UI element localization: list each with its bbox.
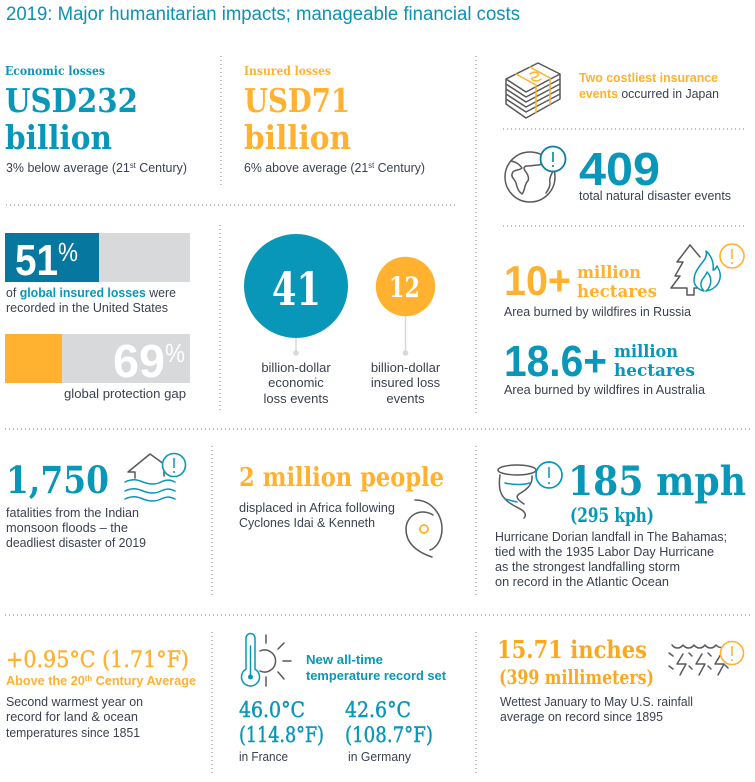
fatalities caption: fatalities from the Indian bbox=[6, 505, 139, 520]
panel: 69 percent bar bbox=[5, 334, 190, 401]
costliest events text: Two costliest insurance bbox=[579, 70, 718, 85]
displaced caption: Cyclones Idai & Kenneth bbox=[239, 515, 375, 530]
panel: 51 percent bar: % bbox=[58, 237, 78, 267]
insured losses value: USD71 bbox=[244, 81, 350, 120]
economic losses note: Century) bbox=[136, 160, 187, 175]
icon: globe with alert bbox=[505, 146, 566, 202]
fatalities caption: deadliest disaster of 2019 bbox=[6, 535, 146, 550]
temperature subheading: th bbox=[85, 674, 92, 683]
Germany record: (108.7°F) bbox=[345, 723, 433, 747]
temperature caption: temperatures since 1851 bbox=[6, 725, 140, 740]
panel: monsoon fatalities bbox=[6, 454, 186, 550]
Australia unit: hectares bbox=[614, 361, 695, 381]
icon: flooded house bbox=[125, 454, 186, 501]
costliest events text: events occurred in Japan bbox=[579, 86, 725, 101]
panel: billion-dollar insured events bbox=[371, 257, 441, 406]
temperature subheading: Century Average bbox=[92, 673, 196, 688]
panel: Russia wildfires bbox=[504, 244, 744, 319]
69 percent caption: global protection gap bbox=[64, 386, 186, 401]
economic events caption: economic bbox=[268, 375, 324, 390]
temperature subheading: Above the 20 bbox=[6, 673, 87, 688]
icon: tornado with alert bbox=[498, 462, 562, 518]
hurricane caption: Hurricane Dorian landfall in The Bahamas; bbox=[495, 529, 727, 544]
Russia unit: hectares bbox=[577, 282, 657, 302]
title: 2019: Major humanitarian impacts; manageable financial costs bbox=[6, 4, 520, 25]
panel: natural disaster events bbox=[505, 143, 731, 203]
insured losses note: st bbox=[368, 161, 375, 170]
panel: 69 percent bar: 69 bbox=[113, 335, 165, 387]
fatalities caption: monsoon floods – the bbox=[6, 520, 128, 535]
51 percent caption: recorded in the United States bbox=[6, 300, 168, 315]
insured losses note: Century) bbox=[374, 160, 425, 175]
economic losses label: Economic losses bbox=[5, 64, 105, 78]
Germany label: in Germany bbox=[348, 749, 411, 764]
panel: displaced people bbox=[239, 463, 444, 557]
economic losses value: USD232 bbox=[5, 81, 138, 120]
economic losses note: 3% below average (21 bbox=[6, 160, 135, 175]
event count: 409 bbox=[579, 143, 660, 195]
panel: 69 percent bar: % bbox=[165, 338, 185, 368]
temperature caption: Second warmest year on bbox=[6, 694, 143, 709]
temperature anomaly: +0.95°C (1.71°F) bbox=[6, 648, 189, 673]
economic losses value: billion bbox=[5, 118, 112, 157]
icon: money stack bbox=[506, 63, 560, 118]
icon: rain storm with alert bbox=[669, 642, 744, 675]
insured losses value: billion bbox=[244, 118, 351, 157]
rainfall caption: average on record since 1895 bbox=[500, 709, 663, 724]
panel: global temperature bbox=[6, 648, 196, 740]
Australia burned area: 18.6+ bbox=[504, 337, 607, 386]
panel: 51 percent bar bbox=[5, 233, 190, 315]
displaced number: 2 million people bbox=[239, 463, 444, 493]
51 percent caption: of global insured losses were bbox=[6, 285, 178, 300]
panel: Australia wildfires bbox=[504, 337, 706, 397]
records heading: temperature record set bbox=[306, 668, 447, 683]
fatalities number: 1,750 bbox=[6, 458, 109, 502]
France record: 46.0°C bbox=[239, 698, 305, 722]
insured losses note: 6% above average (21 bbox=[244, 160, 375, 175]
rainfall caption: Wettest January to May U.S. rainfall bbox=[500, 694, 693, 709]
records heading: New all-time bbox=[306, 652, 383, 667]
insured events caption: billion-dollar bbox=[371, 360, 441, 375]
panel: 51 percent bar: 51 bbox=[15, 236, 58, 285]
insured losses label: Insured losses bbox=[244, 64, 331, 78]
insured events caption: insured loss bbox=[371, 375, 441, 390]
France record: (114.8°F) bbox=[239, 723, 324, 747]
economic events caption: loss events bbox=[263, 391, 329, 406]
hurricane caption: on record in the Atlantic Ocean bbox=[495, 574, 669, 589]
panel: billion-dollar insured events: 12 bbox=[389, 271, 420, 304]
hurricane caption: tied with the 1935 Labor Day Hurricane bbox=[495, 544, 714, 559]
event count caption: total natural disaster events bbox=[579, 188, 731, 203]
panel: billion-dollar economic events: 41 bbox=[272, 262, 321, 316]
Australia unit: million bbox=[614, 342, 678, 362]
hurricane caption: as the strongest landfalling storm bbox=[495, 559, 680, 574]
icon: burning tree bbox=[671, 244, 744, 295]
wind speed metric: (295 kph) bbox=[570, 503, 654, 527]
economic losses note: st bbox=[130, 161, 137, 170]
displaced caption: displaced in Africa following bbox=[239, 500, 395, 515]
Russia burned area: 10+ bbox=[504, 257, 571, 304]
panel: costliest events bbox=[506, 63, 719, 118]
France label: in France bbox=[239, 749, 288, 764]
Germany record: 42.6°C bbox=[345, 698, 411, 722]
panel: temperature records bbox=[239, 634, 447, 764]
rainfall inches: 15.71 inches bbox=[497, 635, 647, 664]
panel: insured losses bbox=[244, 64, 425, 175]
Australia caption: Area burned by wildfires in Australia bbox=[504, 382, 706, 397]
icon: thermometer and sun bbox=[242, 634, 291, 686]
economic events caption: billion-dollar bbox=[261, 360, 331, 375]
insured events caption: events bbox=[386, 391, 425, 406]
panel: rainfall bbox=[497, 635, 744, 724]
temperature caption: record for land & ocean bbox=[6, 709, 138, 724]
Russia caption: Area burned by wildfires in Russia bbox=[504, 304, 692, 319]
Russia unit: million bbox=[577, 263, 641, 283]
rainfall millimeters: (399 millimeters) bbox=[499, 665, 654, 689]
panel: billion-dollar economic events bbox=[244, 234, 348, 406]
panel: economic losses bbox=[5, 64, 187, 175]
panel: hurricane Dorian bbox=[495, 458, 746, 589]
icon: cyclone bbox=[406, 500, 442, 557]
